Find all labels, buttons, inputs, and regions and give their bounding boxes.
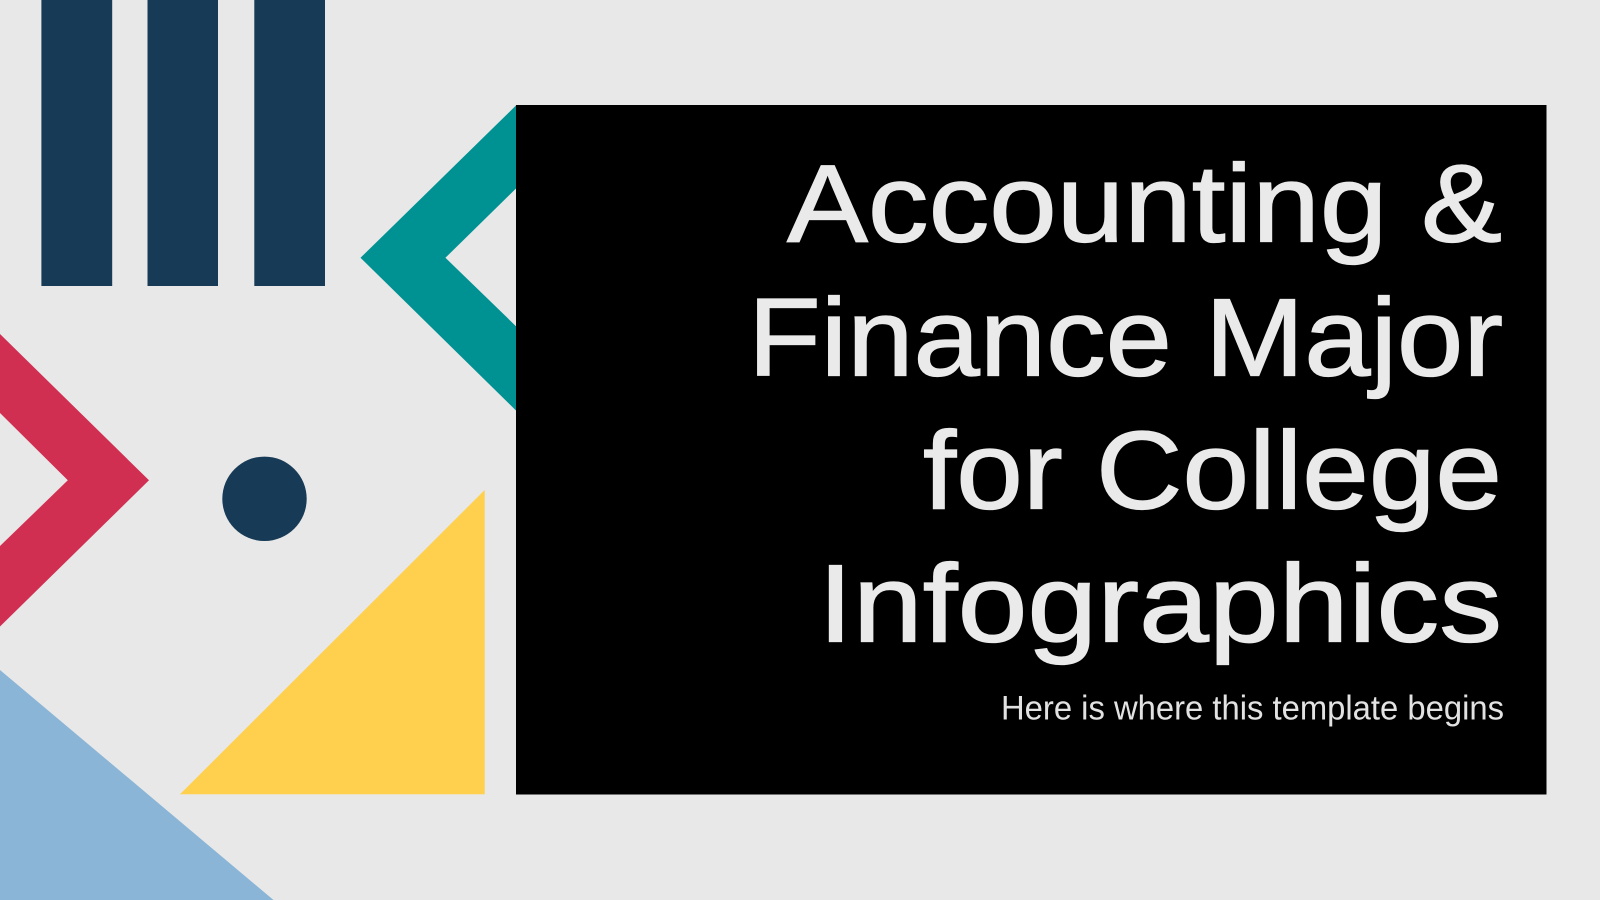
decorative navy vertical bars: [41, 0, 325, 286]
title: Finance Major: [748, 276, 1503, 400]
teal chevron: [360, 105, 516, 411]
light blue triangle: [0, 670, 274, 900]
subtitle: Here is where this template begins: [1001, 690, 1504, 728]
title: Infographics: [818, 542, 1502, 666]
title: Accounting &: [787, 142, 1502, 266]
title: for College: [923, 410, 1502, 532]
black title panel: [516, 105, 1546, 794]
title: [748, 142, 1503, 666]
crimson chevron: [0, 334, 149, 626]
yellow triangle: [180, 490, 485, 794]
navy circle: [222, 457, 307, 541]
